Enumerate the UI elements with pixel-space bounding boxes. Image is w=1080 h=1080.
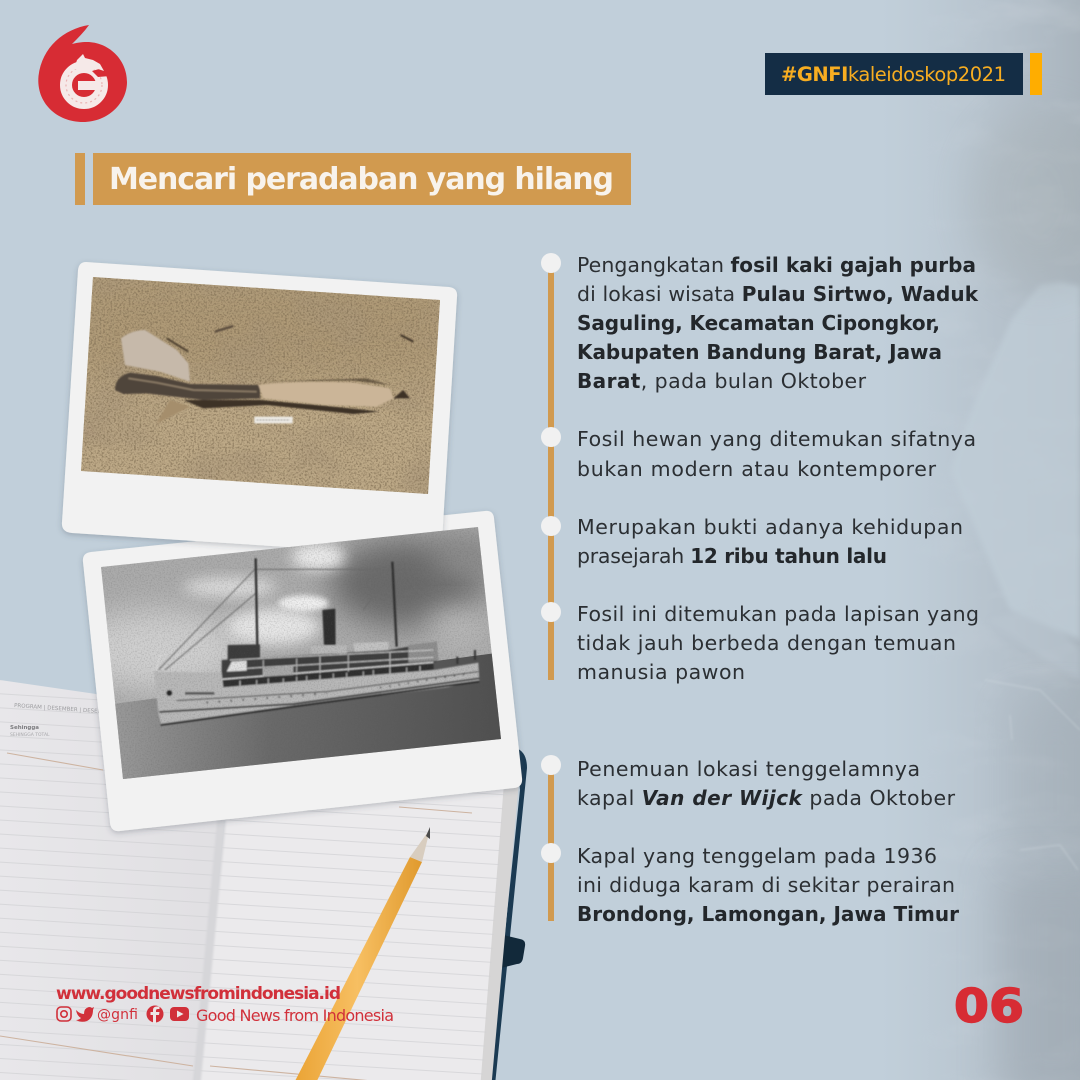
portholes <box>207 693 327 703</box>
page name: Good News from Indonesia <box>196 1006 394 1025</box>
text block: fossil elephant foot <box>577 253 979 393</box>
rigging <box>158 568 364 671</box>
funnel <box>322 609 336 645</box>
notebook right page <box>196 760 512 1080</box>
logo ring <box>66 67 102 103</box>
notebook: Sehingga <box>10 725 39 731</box>
text block: ship sinking: Brondong, Lamongan, Jawa Timur <box>577 902 959 926</box>
text block: fossil elephant foot: Kabupaten Bandung Barat, Jawa <box>577 340 942 364</box>
text block: Pawon man layer <box>577 602 979 684</box>
sea <box>113 653 503 783</box>
notebook bookmark tab <box>501 935 525 968</box>
notebook cover <box>489 748 527 1080</box>
photo: fossil bone in sand <box>81 277 440 494</box>
text block: prehistoric evidence: Merupakan bukti adanya kehidupan <box>577 515 963 539</box>
hashtag tag <box>765 53 1042 95</box>
website: www.goodnewsfromindonesia.id <box>56 984 341 1004</box>
hull <box>154 663 479 726</box>
text block: ship sinking <box>577 844 959 926</box>
notebook left page <box>0 680 230 1080</box>
text block: fossil elephant foot: di lokasi wisata Pulau Sirtwo, Waduk <box>577 282 979 306</box>
text block: Van der Wijck discovery: kapal Van der Wijck pada Oktober <box>577 786 956 810</box>
title: Mencari peradaban yang hilang <box>109 162 614 197</box>
text block: ship sinking: ini diduga karam di sekitar perairan <box>577 873 955 897</box>
text block: modern fossil: Fosil hewan yang ditemukan sifatnya <box>577 427 976 451</box>
notebook <box>0 680 527 1080</box>
text block: Pawon man layer: tidak jauh berbeda dengan temuan <box>577 631 956 655</box>
background <box>944 0 1080 1080</box>
text block: Van der Wijck discovery: Penemuan lokasi tenggelamnya <box>577 757 920 781</box>
stern flag <box>457 650 475 664</box>
text block: prehistoric evidence <box>577 515 963 568</box>
photo card: ship frame <box>83 511 522 831</box>
timeline: fossil <box>541 253 561 680</box>
masts <box>256 558 397 647</box>
icon: youtube <box>170 1007 189 1021</box>
notebook: PROGRAM | DESEMBER | DESEMBER <box>14 703 114 716</box>
logo <box>38 25 127 122</box>
text block: Pawon man layer: manusia pawon <box>577 660 745 684</box>
superstructure <box>228 644 260 660</box>
icon: facebook <box>146 1006 164 1023</box>
text block: modern fossil <box>577 427 976 481</box>
icon: instagram <box>57 1007 71 1021</box>
hashtag tag: #GNFIkaleidoskop2021 <box>781 63 1006 86</box>
text block: prehistoric evidence: prasejarah 12 ribu tahun lalu <box>577 544 887 568</box>
text block: fossil elephant foot: Saguling, Kecamatan Cipongkor, <box>577 311 940 335</box>
icon: twitter <box>76 1007 94 1022</box>
handle: @gnfi <box>97 1007 138 1023</box>
photo card: fossil <box>62 262 457 557</box>
text block: modern fossil: bukan modern atau kontemporer <box>577 457 937 481</box>
timeline: ship <box>541 755 561 921</box>
pencil <box>293 827 430 1080</box>
photo: ship Van der Wijck <box>101 527 501 779</box>
footer: website and social <box>56 984 394 1025</box>
text block: fossil elephant foot: Barat, pada bulan Oktober <box>577 369 867 393</box>
page number: 06 <box>954 979 1024 1033</box>
text block: ship sinking: Kapal yang tenggelam pada 1936 <box>577 844 937 868</box>
notebook: SEHINGGA TOTAL <box>10 732 50 738</box>
title <box>75 153 631 205</box>
text block: Van der Wijck discovery <box>577 757 956 810</box>
text block: fossil elephant foot: Pengangkatan fosil kaki gajah purba <box>577 253 976 277</box>
card frame <box>62 262 457 557</box>
text block: Pawon man layer: Fosil ini ditemukan pada lapisan yang <box>577 602 979 626</box>
clouds <box>70 610 243 690</box>
